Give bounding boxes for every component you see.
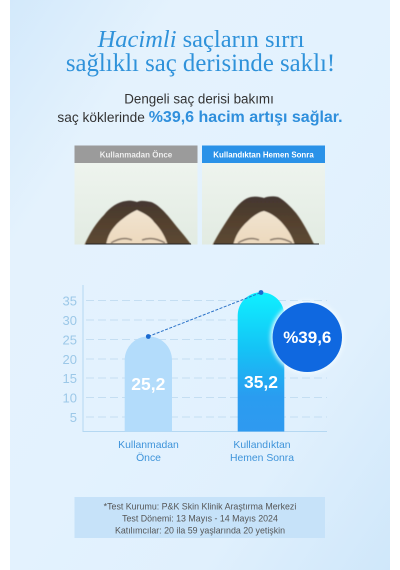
grid lines [86, 300, 327, 417]
header: after: Kullandıktan Hemen Sonra [213, 150, 314, 160]
photo: after [202, 163, 325, 246]
footnote: *Test Kurumu: P&K Skin Klinik Araştırma Merkezi [104, 502, 296, 512]
title: sağlıklı saç derisinde saklı! [66, 50, 335, 77]
y-axis labels: 25 [63, 332, 77, 348]
y-axis labels [63, 294, 77, 425]
bar: before: 25,2 [131, 374, 166, 394]
x-axis label: after [230, 440, 294, 464]
subtitle [57, 92, 343, 126]
photo panel: before [74, 146, 198, 246]
bar: before [125, 336, 172, 432]
title: Hacimli saçların sırrı [97, 26, 305, 53]
y-axis labels: 10 [63, 390, 77, 406]
axes [83, 285, 327, 432]
title [66, 26, 335, 77]
x-axis label: after: Kullandıktan [233, 440, 291, 451]
subtitle: saç köklerinde %39,6 hacim artışı sağlar. [57, 109, 343, 126]
bar chart [63, 285, 344, 464]
trend line [146, 290, 263, 339]
bar: after: 35,2 [244, 372, 278, 392]
subtitle: Dengeli saç derisi bakımı [124, 92, 274, 106]
x-axis label: after: Hemen Sonra [230, 453, 294, 464]
header: before: Kullanmadan Önce [100, 150, 173, 160]
bar: after [238, 292, 284, 432]
y-axis labels: 20 [63, 352, 77, 367]
photo: before [74, 163, 198, 246]
footnote: Test Dönemi: 13 Mayıs - 14 Mayıs 2024 [122, 514, 278, 524]
y-axis labels: 35 [63, 294, 77, 308]
y-axis labels: 30 [63, 313, 77, 328]
callout badge: %39,6 [283, 328, 331, 347]
x-axis label: before: Önce [136, 452, 161, 464]
footnote [74, 497, 325, 538]
footnote: Katılımcılar: 20 ila 59 yaşlarında 20 yetişkin [115, 526, 285, 536]
x-axis label: before: Kullanmadan [118, 440, 179, 451]
y-axis labels: 15 [63, 371, 77, 386]
callout badge [271, 301, 344, 374]
y-axis labels: 5 [70, 410, 77, 425]
photo panel: after [202, 146, 325, 246]
x-axis label: before [118, 440, 179, 464]
